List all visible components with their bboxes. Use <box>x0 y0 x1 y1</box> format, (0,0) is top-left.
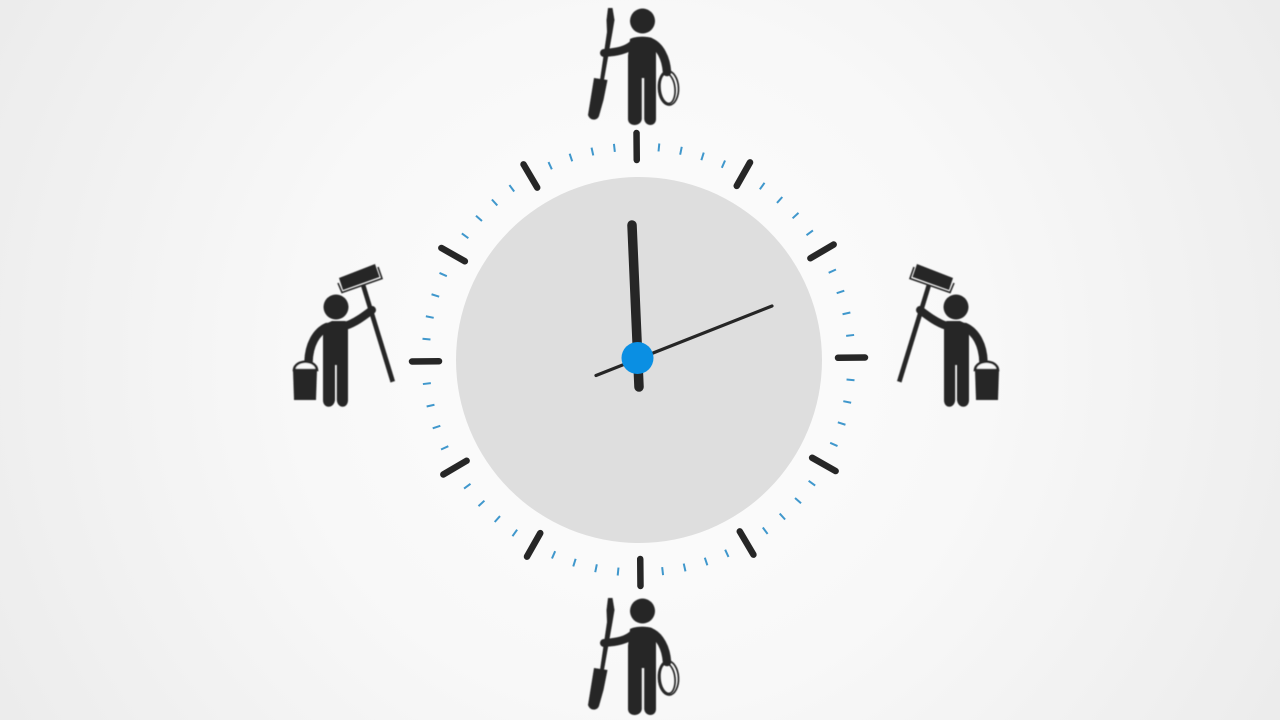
minute ticks <box>421 142 856 577</box>
icon: electrician top <box>588 8 679 125</box>
center hub <box>622 342 654 374</box>
icon: painter right <box>897 264 999 407</box>
icon: electrician bottom <box>588 598 679 715</box>
clock dial <box>410 131 867 588</box>
icon: painter left <box>293 264 395 407</box>
minute hand <box>632 225 639 387</box>
hour ticks <box>410 131 867 588</box>
clock face disc <box>456 177 822 543</box>
second hand <box>596 306 772 376</box>
